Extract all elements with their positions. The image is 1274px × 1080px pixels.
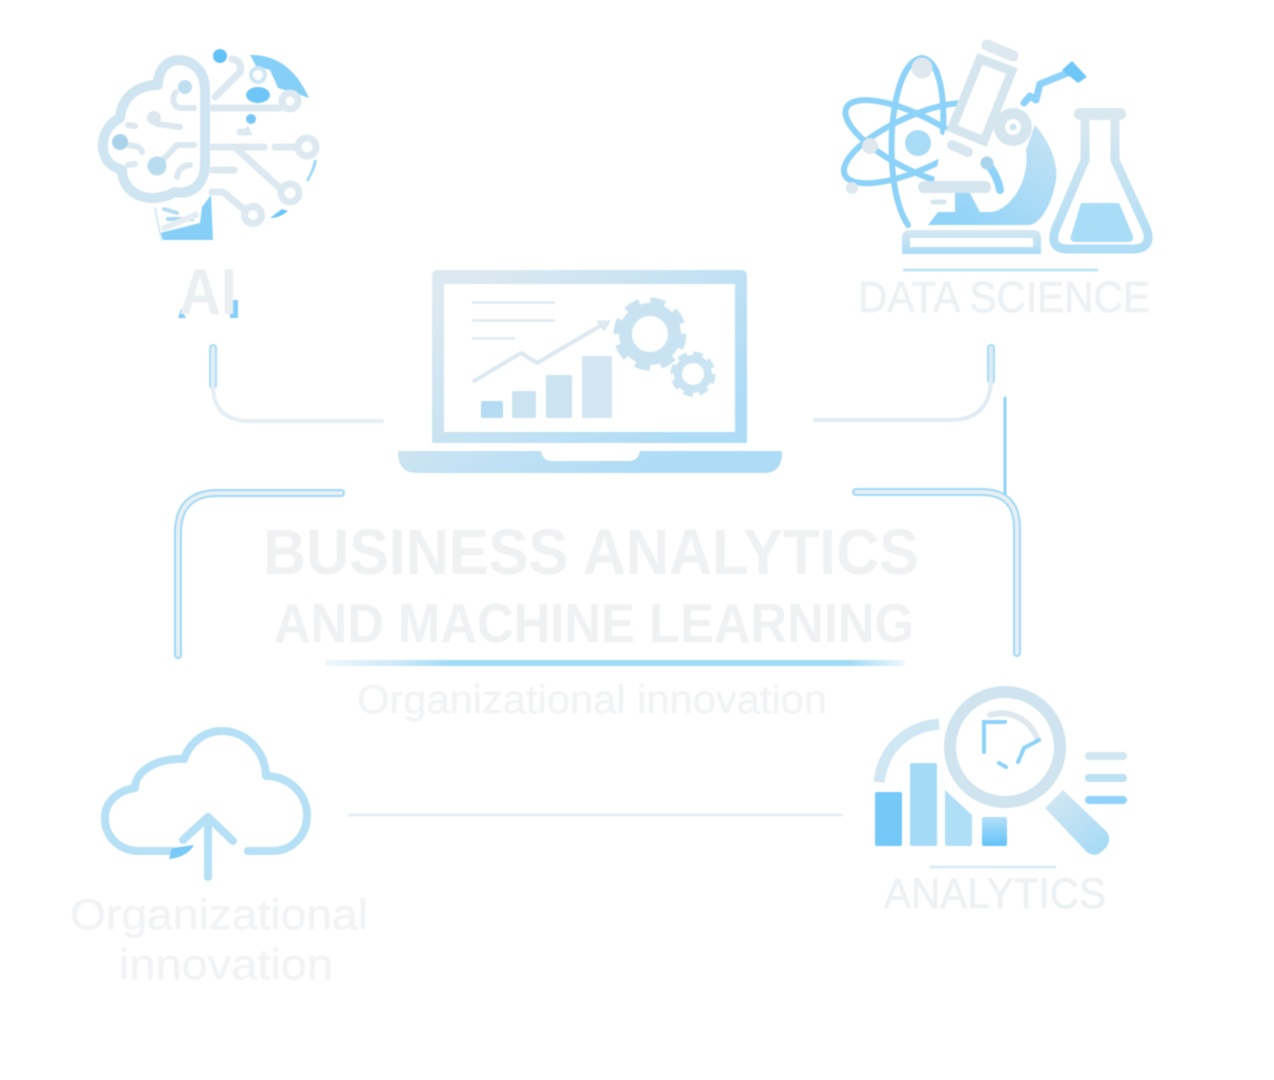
magnifier lens bbox=[950, 692, 1060, 802]
lens figure fragments bbox=[984, 713, 1039, 767]
microscope knob and stage bbox=[924, 156, 1000, 202]
microscope base bbox=[902, 230, 1041, 254]
cloud outline bbox=[105, 731, 307, 851]
flask bbox=[1054, 114, 1148, 249]
arc bbox=[879, 724, 939, 782]
atom bbox=[834, 58, 1005, 232]
label: AI: AI bbox=[179, 255, 237, 328]
connector: analytics to title bbox=[856, 492, 1017, 653]
label: organizational innovation bbox=[70, 891, 368, 989]
title line 2: AND MACHINE LEARNING bbox=[274, 592, 914, 654]
brain inner circuits bbox=[128, 92, 194, 177]
brain outline bbox=[103, 60, 205, 198]
microscope body bbox=[928, 125, 1056, 225]
main title bbox=[263, 516, 919, 654]
large gear bbox=[617, 301, 683, 367]
circuit ring nodes bbox=[244, 68, 316, 224]
icon: AI brain bbox=[103, 49, 317, 240]
label: data science: DATA SCIENCE bbox=[858, 273, 1150, 322]
laptop screen frame bbox=[432, 270, 747, 443]
circuit traces bbox=[212, 59, 297, 211]
icon: laptop with chart and gears bbox=[398, 270, 782, 473]
screen trend arrow bbox=[474, 321, 610, 381]
list lines bbox=[1089, 756, 1123, 800]
laptop base bbox=[398, 451, 782, 473]
title line 1: BUSINESS ANALYTICS bbox=[263, 516, 919, 588]
screen bar chart bbox=[481, 356, 612, 418]
blue fragment bbox=[169, 845, 194, 859]
icon: data science bbox=[834, 45, 1148, 254]
label line 1: Organizational bbox=[70, 891, 368, 939]
connector: cloud to analytics bbox=[348, 814, 842, 816]
accent rule under data science icon bbox=[903, 268, 1098, 272]
bar chart bbox=[875, 763, 1007, 846]
blue hemisphere fragments bbox=[213, 49, 317, 218]
magnifier handle bbox=[1045, 790, 1109, 855]
screen text lines bbox=[472, 302, 555, 338]
small gear bbox=[673, 354, 713, 394]
microscope tube bbox=[952, 45, 1013, 152]
accent rule under analytics icon bbox=[930, 866, 1056, 868]
brain nodes bbox=[112, 80, 192, 176]
upload arrow bbox=[183, 817, 233, 877]
microscope eyepiece ring bbox=[1000, 114, 1026, 140]
icon: cloud upload bbox=[105, 731, 307, 877]
connector: AI to laptop bbox=[213, 348, 382, 421]
connector: cloud to title bbox=[178, 493, 341, 655]
title underline bbox=[328, 660, 902, 666]
label: analytics: ANALYTICS bbox=[884, 870, 1106, 918]
label line 2: innovation bbox=[119, 941, 333, 989]
brain neck bbox=[155, 195, 213, 240]
chart arrow bbox=[1024, 61, 1087, 103]
connector: data science to laptop bbox=[815, 348, 1005, 494]
subtitle: Organizational innovation bbox=[357, 678, 827, 722]
icon: analytics magnifier bbox=[875, 692, 1123, 855]
